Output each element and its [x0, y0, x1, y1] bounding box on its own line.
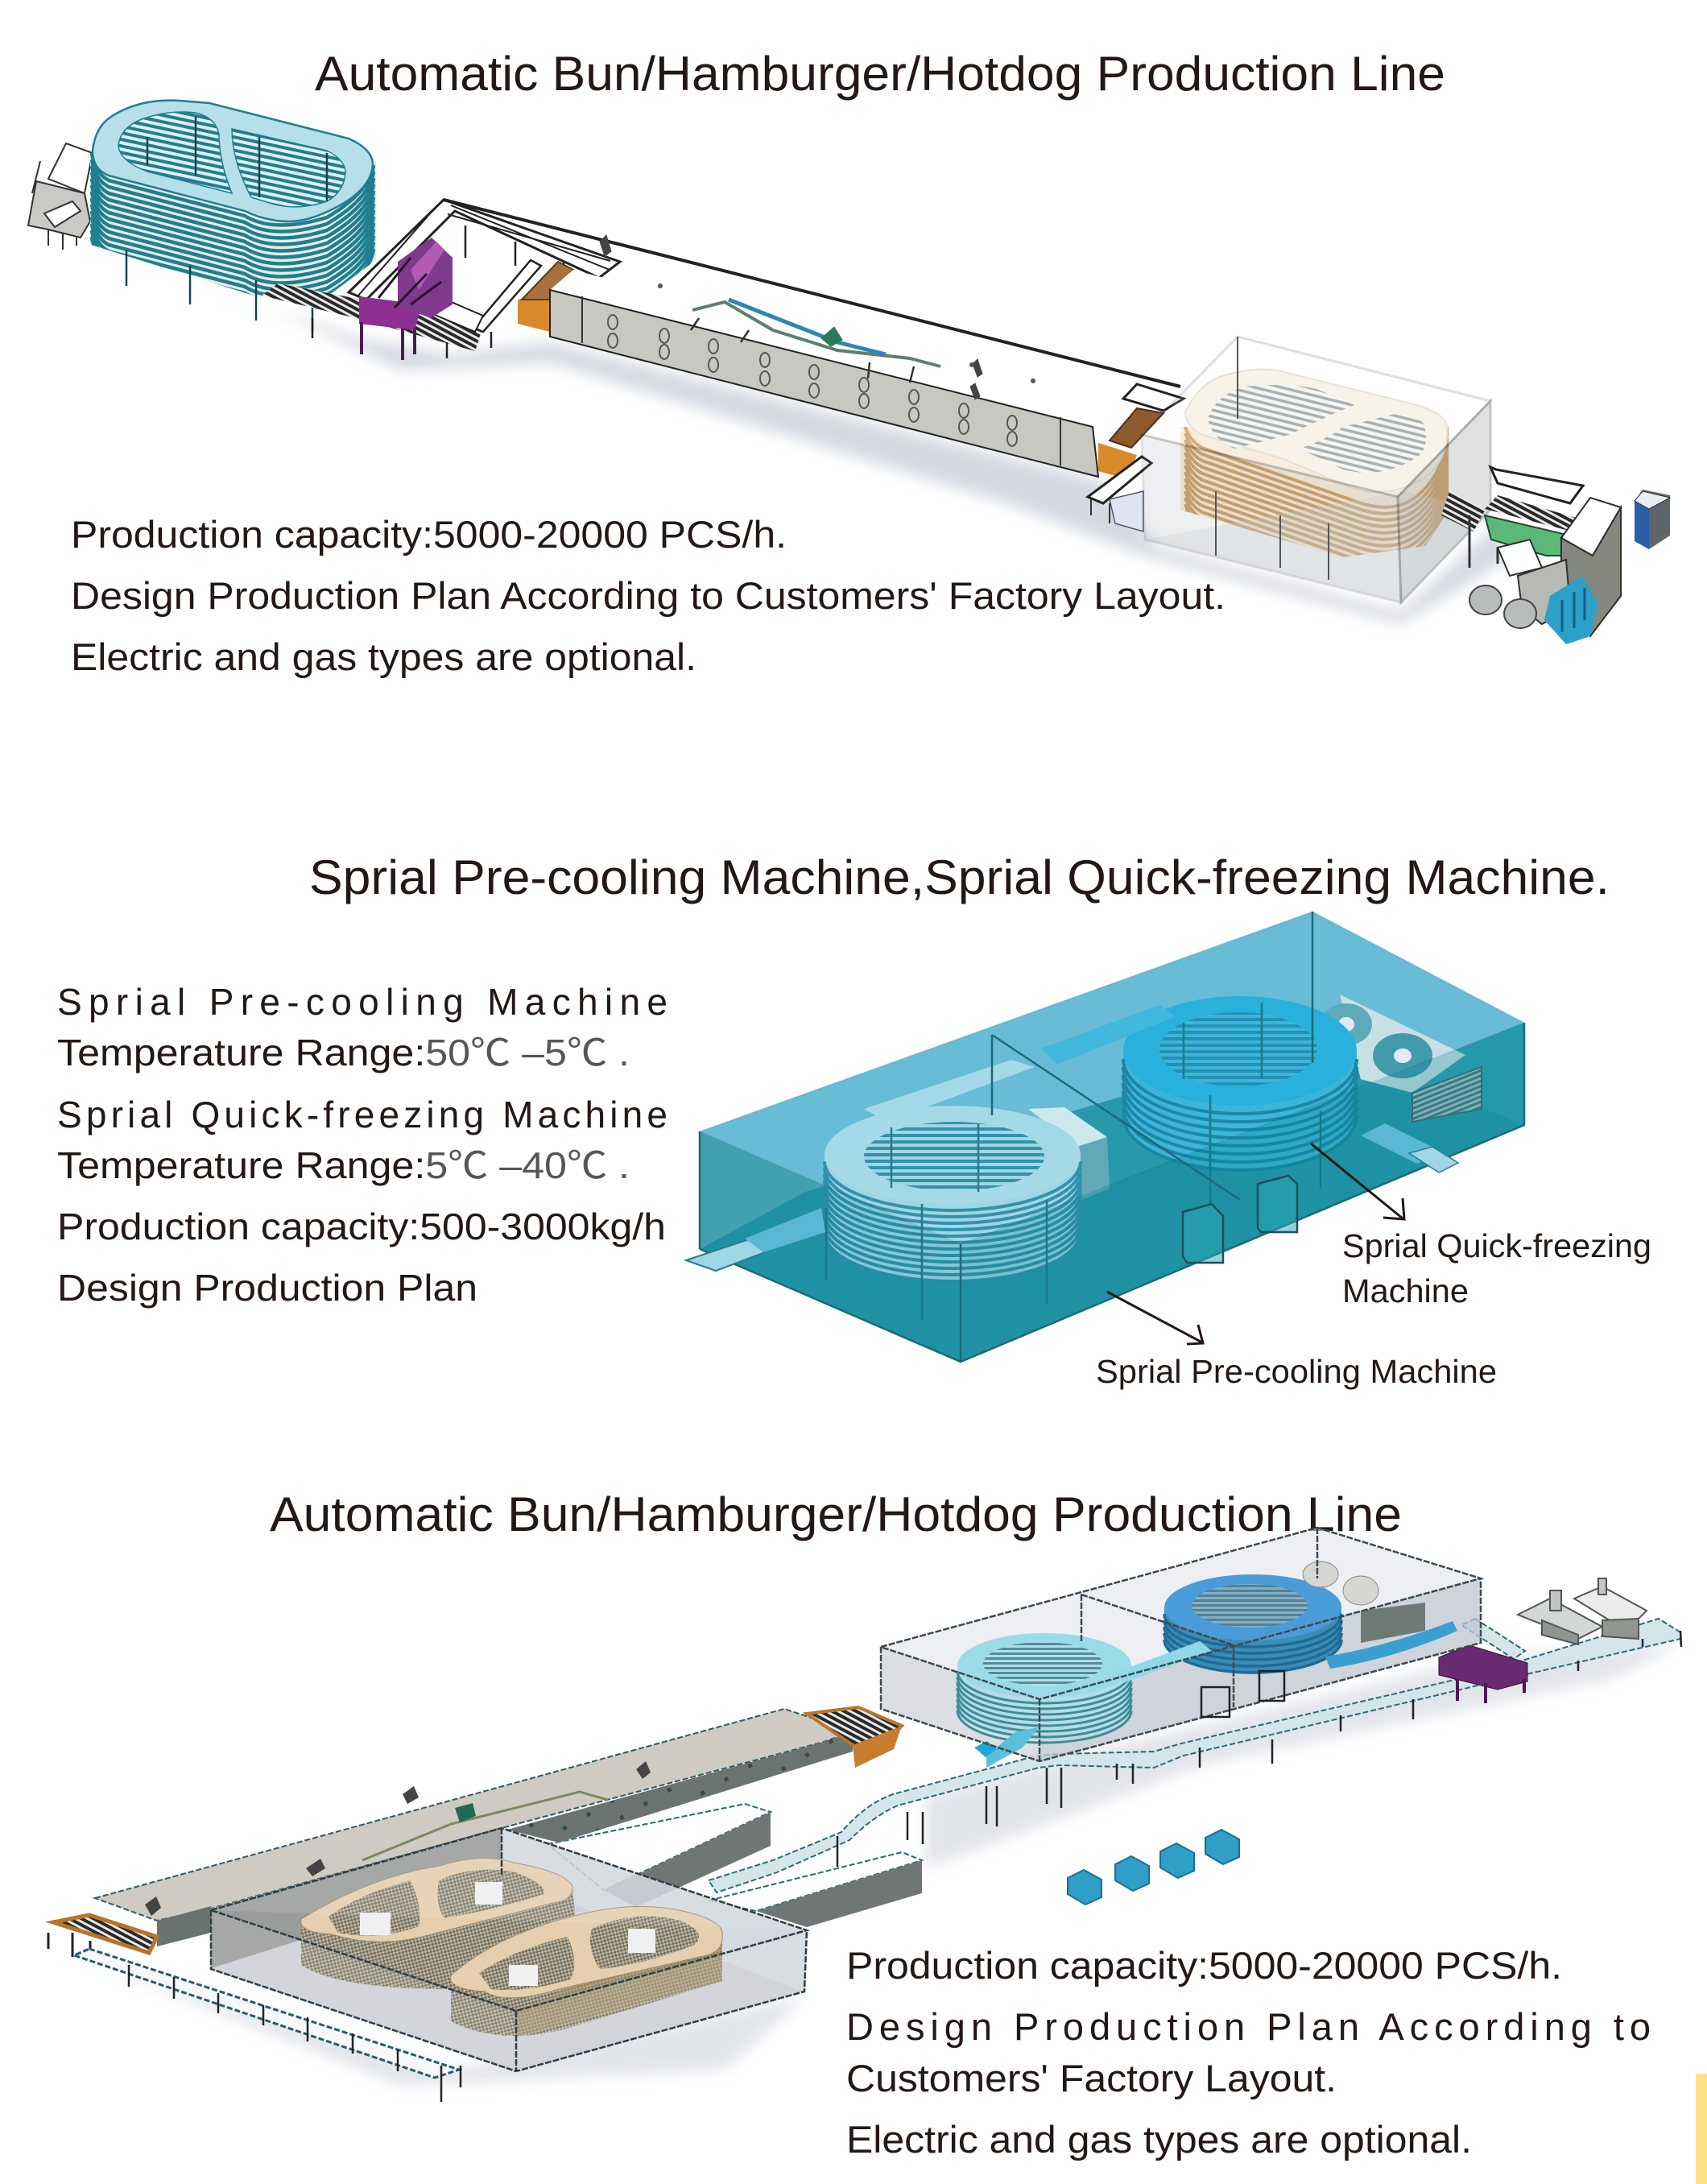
text block: spiral specs: [57, 981, 668, 1309]
conveyor loop with hatched roller: [262, 200, 620, 358]
icon: pre-cooling coil: [825, 1106, 1081, 1321]
text block: line 2 specs: Design Production Plan According to: [846, 2005, 1651, 2048]
icon: feed conveyor rails: [548, 1619, 1681, 1927]
text block: line 2 specs: Electric and gas types are optional.: [846, 2118, 1472, 2161]
chamber box frame: [881, 1528, 1481, 1761]
icon: lower rail: [74, 1949, 461, 2102]
icon: big chamber floor: [209, 1876, 804, 2071]
label: quick-freezing machine: [1342, 1227, 1651, 1309]
label: quick-freezing machine: Machine: [1342, 1272, 1469, 1309]
arrow: to quick-freezing machine: [1311, 1144, 1404, 1219]
label: pre-cooling machine: Sprial Pre-cooling Machine: [1096, 1353, 1497, 1390]
panel: teal spiral chamber: [686, 912, 1524, 1362]
text block: line 2 specs: Production capacity:5000-20000 PCS/h.: [846, 1944, 1562, 1987]
panel: production line layout 1: [28, 101, 1670, 644]
icon: blue mixers: [1469, 576, 1598, 644]
text block: spiral specs: Temperature Range: 5℃ –40℃ .: [57, 1144, 630, 1186]
icon: quick-freezing coil: [1123, 996, 1357, 1208]
text block: line 1 specs: [71, 513, 1225, 678]
icon: purple machine: [359, 238, 453, 360]
icon: top-right machines: [1518, 1578, 1647, 1644]
text block: line 1 specs: Production capacity:5000-20000 PCS/h.: [71, 513, 787, 556]
oven vent holes: [608, 315, 1017, 446]
label: quick-freezing machine: Sprial Quick-freezing: [1342, 1227, 1651, 1264]
upper conveyor belts: [1041, 1005, 1176, 1065]
text block: line 1 specs: Electric and gas types are optional.: [71, 635, 696, 678]
yellow corner bar: [1696, 2074, 1707, 2184]
title: production line 2: Automatic Bun/Hamburger/Hotdog Production Line: [270, 1487, 1402, 1541]
icon: orange transfer right: [1088, 384, 1184, 532]
title: production line 1: Automatic Bun/Hamburger/Hotdog Production Line: [315, 47, 1445, 101]
text block: spiral specs: Sprial Quick-freezing Machine: [57, 1094, 668, 1135]
text block: spiral specs: Production capacity:500-3000kg/h: [57, 1206, 666, 1247]
text block: line 1 specs: Design Production Plan According to Customers' Factory Layout.: [71, 574, 1225, 617]
icon: orange transfers lower: [48, 1707, 902, 1959]
icon: oven tunnel: [444, 200, 1180, 477]
chamber floor and rear faces: [700, 912, 1524, 1244]
translucent faces overlay: [700, 1131, 961, 1362]
icon: spiral tower cream in chamber: [1180, 369, 1449, 557]
icon: left feeder machine: [28, 143, 93, 250]
icon: spiral tower blue: [90, 101, 376, 332]
shadow under line: [266, 306, 1514, 624]
icon: purple machine: [1439, 1645, 1527, 1703]
icon: small blue units: [1068, 1830, 1239, 1905]
icon: orange transfer left: [518, 262, 573, 332]
icon: chamber doors: [1201, 1671, 1284, 1717]
icon: chamber box upper: [881, 1528, 1481, 1761]
text block: line 2 specs: [846, 1944, 1651, 2161]
infeed and outfeed belts: [686, 1123, 1458, 1271]
icon: blue control cabinet: [1635, 490, 1670, 549]
panel: production line layout 2: [48, 1528, 1683, 2102]
chamber: transparent insulation box: [1142, 337, 1490, 602]
text block: spiral specs: Temperature Range: 50℃ –5℃ .: [57, 1032, 630, 1073]
icon: quick-freezing coil blue: [1164, 1561, 1457, 1673]
title: spiral machines: Sprial Pre-cooling Machine,Sprial Quick-freezing Machine.: [309, 850, 1610, 904]
icon: chamber doors: [1183, 1176, 1297, 1263]
arrow: to pre-cooling machine: [1107, 1292, 1203, 1344]
icon: pre-cooling coil pale: [957, 1633, 1212, 1768]
icon: oven tunnel lower: [95, 1709, 853, 1969]
icon: fans and evaporator: [1321, 995, 1482, 1122]
text block: line 2 specs: Customers' Factory Layout.: [846, 2057, 1337, 2099]
text block: spiral specs: Sprial Pre-cooling Machine: [57, 981, 668, 1023]
oven top piping: [600, 235, 1035, 399]
shadows: [81, 1643, 1683, 2086]
icon: twin S coils: [301, 1858, 722, 2037]
icon: right conveyor and green machine: [1441, 467, 1583, 568]
icon: gray machine: [1498, 498, 1621, 636]
big chamber box frame: [211, 1828, 807, 2071]
text block: spiral specs: Design Production Plan: [57, 1267, 477, 1309]
icon: big chamber back wall right: [502, 1828, 807, 1992]
